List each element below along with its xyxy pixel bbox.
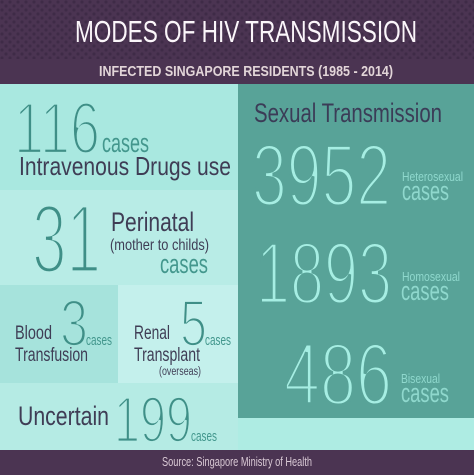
label: Intravenous Drugs use [19,151,231,181]
number 3: 3 [60,286,88,360]
bisexual label: Bisexual [401,371,440,386]
subtitle: INFECTED SINGAPORE RESIDENTS (1985 - 2014) [99,64,393,80]
number 1893: 1893 [256,224,392,322]
cases label: cases [160,249,208,279]
number 486: 486 [284,324,392,424]
label: Blood [15,323,52,344]
number 116: 116 [14,88,100,170]
number 3952: 3952 [252,126,391,224]
note: (overseas) [159,366,201,378]
number 31: 31 [32,184,101,294]
panel: blood transfusion [0,285,118,383]
note: (mother to childs) [110,237,209,254]
label: Uncertain [18,401,109,431]
header band [0,0,474,84]
homosexual label: Homosexual [402,269,460,284]
number 5: 5 [180,286,207,360]
panel: perinatal [0,184,238,294]
source: Source: Singapore Ministry of Health [162,454,312,469]
panel: intravenous drugs [0,84,238,190]
number 199: 199 [114,383,192,456]
panel: uncertain [0,383,238,456]
panel: renal transplant [118,285,238,383]
cases label: cases [205,332,231,349]
cases label: cases [191,428,217,445]
cases label: cases [102,128,149,158]
cases label: cases [402,176,449,206]
heading: Perinatal [111,207,194,237]
cases label: cases [401,378,449,408]
cases label: cases [401,276,449,306]
panel: renal transplant: Transplant [134,345,201,366]
panel: sexual transmission [238,84,474,424]
cases label: cases [86,332,112,349]
panel: blood transfusion: Transfusion [15,345,88,366]
label: Renal [134,323,170,344]
footer band [0,450,474,475]
